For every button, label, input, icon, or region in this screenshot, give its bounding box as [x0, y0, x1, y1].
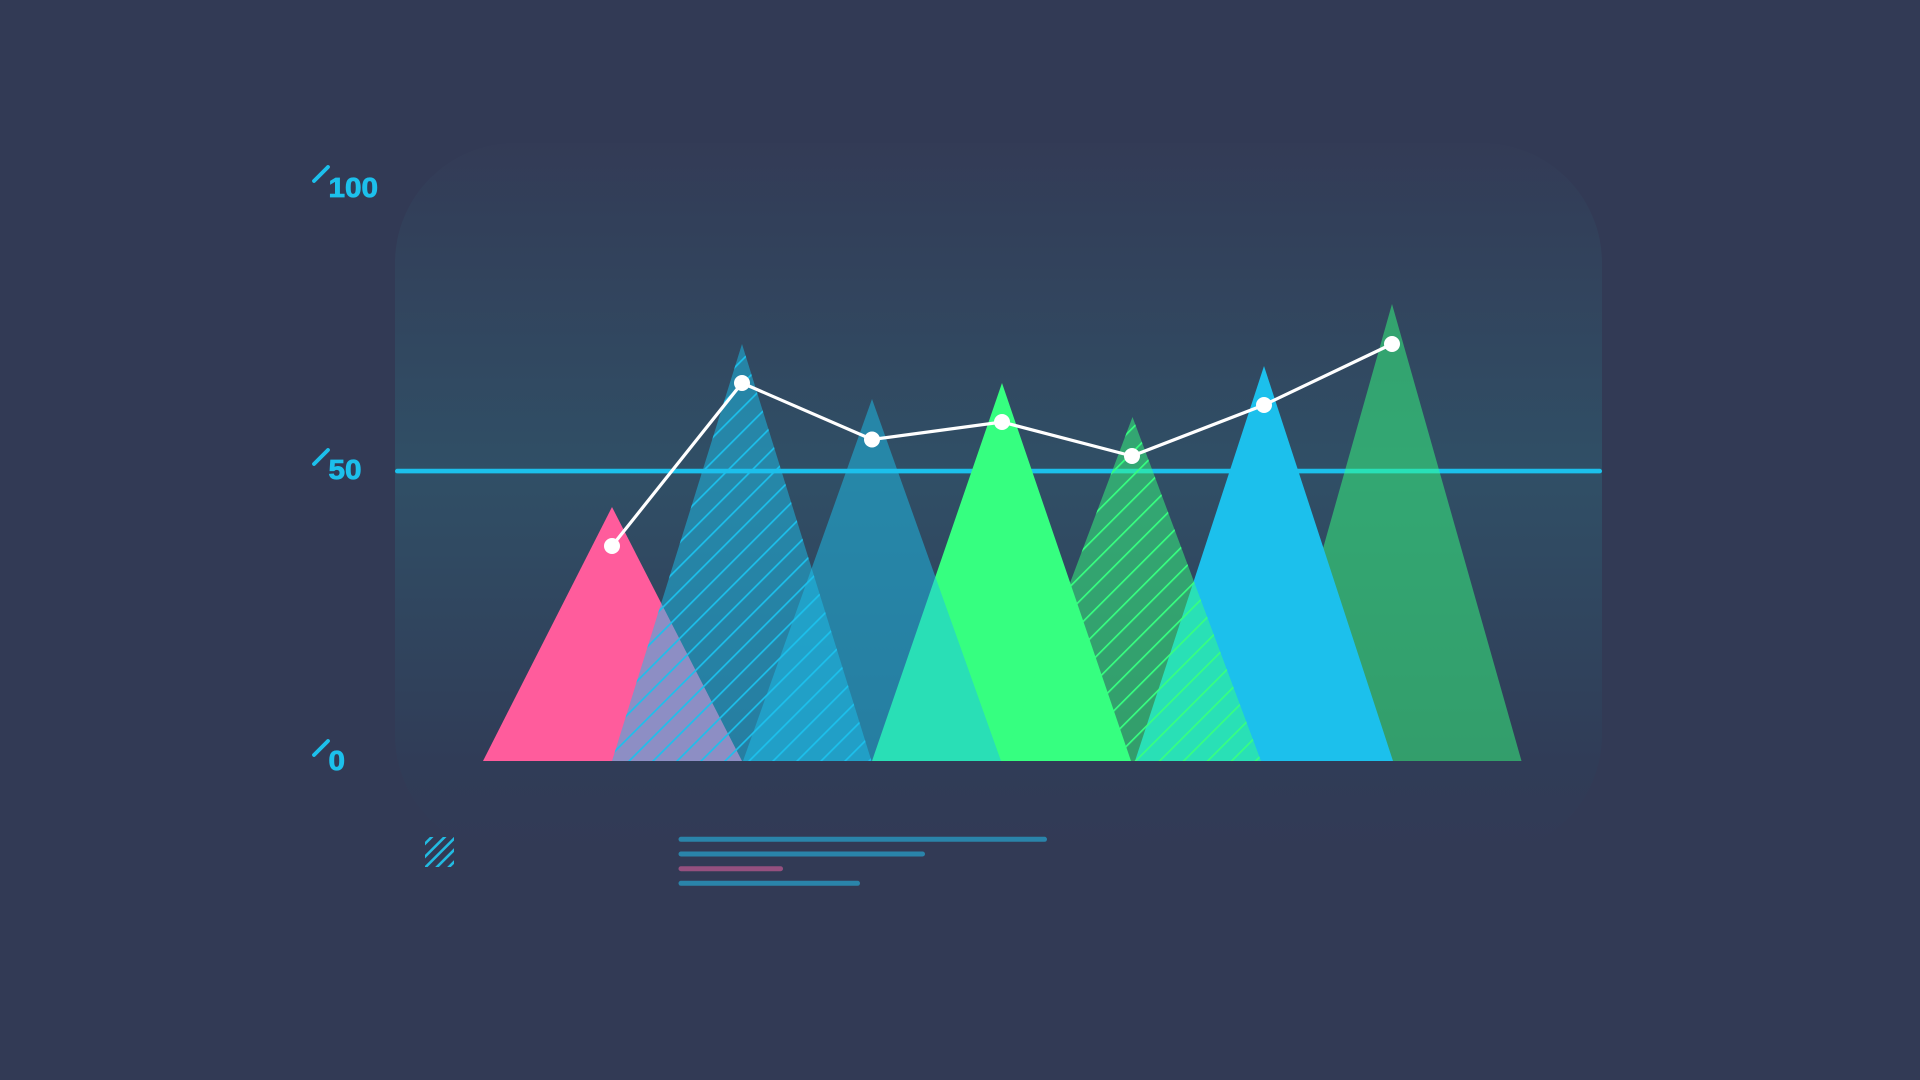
- infographic chart canvas: [312, 165, 1602, 886]
- axis label: 0: 0: [328, 745, 345, 776]
- axis tick: 100: [314, 167, 328, 181]
- triangle: blue, series 3: [743, 399, 1001, 761]
- panel: chart background: [395, 143, 1602, 855]
- axis labels: [314, 167, 378, 776]
- reference line at 50: [395, 469, 1602, 473]
- line chart with data points: [604, 336, 1400, 554]
- axis tick: 50: [314, 450, 328, 464]
- axis label: 100: 100: [328, 172, 378, 203]
- icon: legend hatch swatch: [425, 837, 454, 867]
- triangle: cyan, series 6: [1135, 366, 1393, 761]
- triangle: hatched blue, series 2: [612, 344, 872, 761]
- legend bars: [678, 837, 1047, 886]
- triangle: bright green, series 4: [872, 383, 1131, 761]
- triangle: pink, series 1: [483, 507, 742, 761]
- triangle: dark green, series 7: [1263, 304, 1522, 761]
- triangle: hatched green, series 5: [1003, 417, 1261, 761]
- axis tick: 0: [314, 741, 328, 755]
- axis label: 50: 50: [328, 454, 362, 485]
